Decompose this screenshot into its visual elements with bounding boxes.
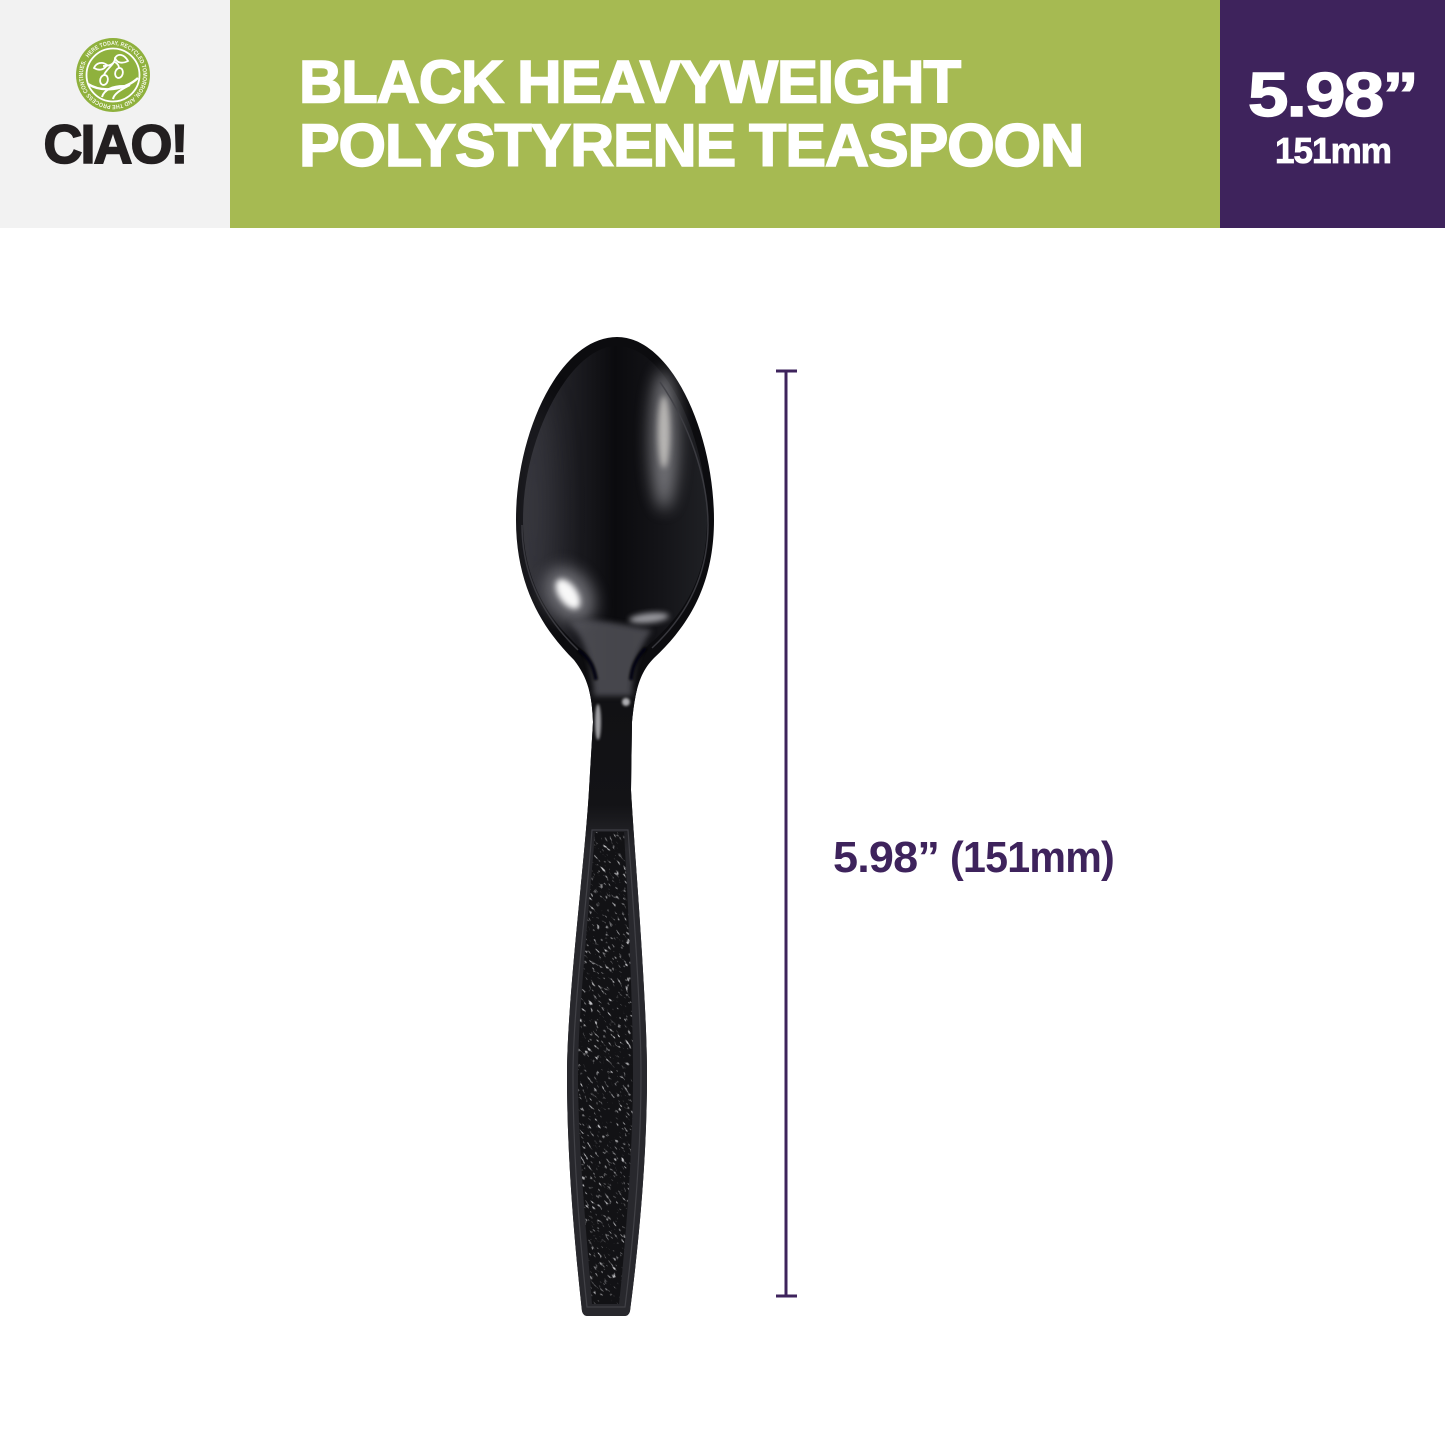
panel: title banner	[230, 0, 1220, 228]
dimension line	[776, 371, 797, 1296]
size in inches: 5.98”	[1248, 61, 1417, 130]
spoon body	[516, 337, 714, 1316]
dimension label	[833, 833, 1114, 882]
size in millimetres: 151mm	[1275, 130, 1391, 171]
handle grip	[572, 830, 642, 1308]
bowl rim	[522, 382, 708, 650]
panel: logo	[0, 0, 230, 228]
icon: olive branch badge: HERE TODAY, RECYCLED TOMORROW, AND THE PROCESS CONTINUES.	[78, 40, 148, 110]
title: BLACK	[299, 48, 504, 116]
spoon photo	[516, 337, 714, 1316]
title	[299, 48, 1083, 179]
title: TEASPOON	[749, 112, 1083, 179]
title: HEAVYWEIGHT	[517, 48, 961, 116]
title: POLYSTYRENE	[299, 112, 735, 179]
panel: size badge	[1220, 0, 1445, 228]
brand name: CIAO!	[44, 113, 186, 175]
bowl shading and highlights	[517, 346, 707, 1320]
dimension label: (151mm)	[950, 833, 1114, 882]
dimension label: 5.98”	[833, 833, 939, 882]
